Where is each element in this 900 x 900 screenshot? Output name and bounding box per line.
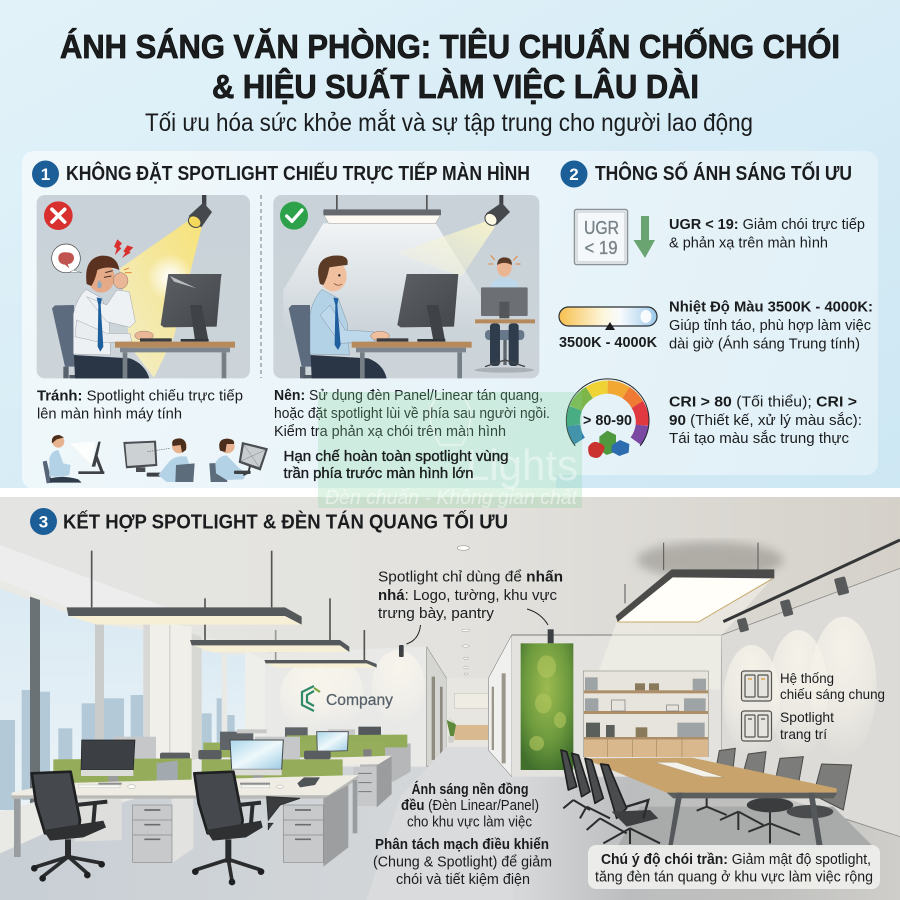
caption: avoid: lên màn hình máy tính <box>37 406 182 422</box>
icon: tilted screen <box>209 439 268 482</box>
watermark: Đèn chuẩn - Không gian chất <box>325 487 578 509</box>
label: general lighting: chiếu sáng chung <box>780 686 885 702</box>
text: colour temperature: dài giờ (Ánh sáng Trung tính) <box>669 336 860 352</box>
text: colour temperature: Nhiệt Độ Màu 3500K - 4000K: <box>669 300 873 316</box>
label: decorative spotlight: Spotlight <box>780 709 834 725</box>
label: general lighting: Hệ thống <box>780 670 834 686</box>
white separator band <box>0 488 900 497</box>
callout: background lighting <box>401 781 539 830</box>
text: CRI: Tái tạo màu sắc trung thực <box>669 430 849 447</box>
callout: background lighting: đều (Đèn Linear/Panel) <box>401 798 539 814</box>
callout: separate circuits: chói và tiết kiệm điện <box>396 872 530 888</box>
caption: recommended: Kiểm tra phản xạ chói trên màn hình <box>274 424 506 440</box>
icon: viewing reflection <box>123 438 195 482</box>
section 3 badge: 3 <box>39 512 48 532</box>
caption: recommended: Nên: Sử dụng đèn Panel/Linear tán quang, <box>274 388 543 404</box>
caption: recommended: hoặc đặt spotlight lùi về phía sau người ngồi. <box>274 406 550 422</box>
icon: CRI gauge: > 80-90 <box>583 412 632 429</box>
callout: separate circuits: (Chung & Spotlight) để giảm <box>373 854 552 870</box>
label: decorative spotlight <box>780 709 834 742</box>
caption: avoid <box>37 388 243 422</box>
section 1 badge <box>32 160 59 188</box>
text: CRI: 90 (Thiết kế, xử lý màu sắc): <box>669 412 862 429</box>
title <box>60 27 840 106</box>
office scene illustration <box>0 497 900 900</box>
icon: CRI gauge <box>566 379 649 458</box>
arrow: leader to wall spotlight <box>406 625 420 644</box>
callout: spotlight accent: trưng bày, pantry <box>378 606 495 622</box>
icon: colour temperature scale <box>559 307 658 351</box>
illustration: correct diffuse lighting <box>273 195 539 378</box>
section 3 heading: KẾT HỢP SPOTLIGHT & ĐÈN TÁN QUANG TỐI ƯU <box>63 510 508 534</box>
icon: green down arrow <box>634 216 655 258</box>
arrow: leader to green wall spotlight <box>527 609 548 625</box>
watermark <box>318 392 582 509</box>
panel: section 1 spotlight placement <box>22 151 556 489</box>
icon: UGR box: < 19 <box>584 238 618 258</box>
callout: separate circuits <box>373 837 552 888</box>
section 1 badge: 1 <box>41 165 50 184</box>
callout: separate circuits: Phân tách mạch điều khiển <box>375 837 549 853</box>
callout: spotlight accent <box>378 570 563 622</box>
callout: ceiling glare: Chú ý độ chói trần: Giảm mật độ spotlight, <box>601 852 871 868</box>
text: colour temperature: Giúp tỉnh táo, phù hợp làm việc <box>669 318 871 334</box>
subtitle: Tối ưu hóa sức khỏe mắt và sự tập trung cho người lao động <box>145 108 753 137</box>
label: decorative spotlight: trang trí <box>780 726 827 742</box>
icon: person squinting at glare <box>43 435 104 483</box>
divider between wrong and right <box>260 195 262 378</box>
section 3 badge <box>30 508 57 535</box>
illustration: wrong spotlight on screen <box>37 195 250 378</box>
section 2 badge: 2 <box>569 165 579 184</box>
callout: spotlight accent: Spotlight chỉ dùng để nhấn <box>378 570 563 586</box>
page background <box>0 0 900 490</box>
restriction note: trần phía trước màn hình lớn <box>284 466 474 482</box>
text: UGR <box>669 217 865 252</box>
callout: background lighting: cho khu vực làm việc <box>407 814 532 830</box>
text: colour temperature <box>669 300 873 352</box>
logo: Company <box>302 686 393 711</box>
icon: general lighting switch <box>742 671 772 701</box>
icon: UGR box <box>574 210 628 264</box>
icon: UGR box: UGR <box>584 218 619 238</box>
section 1 heading: KHÔNG ĐẶT SPOTLIGHT CHIẾU TRỰC TIẾP MÀN HÌNH <box>66 161 530 185</box>
restriction note: Hạn chế hoàn toàn spotlight vùng <box>284 449 508 465</box>
title: & HIỆU SUẤT LÀM VIỆC LÂU DÀI <box>212 68 699 106</box>
icon: decorative spotlight switch <box>742 711 772 741</box>
panel: section 3 office scene <box>0 497 900 900</box>
text: CRI: CRI > 80 (Tối thiểu); CRI > <box>669 394 857 410</box>
callout: background lighting: Ánh sáng nền đồng <box>412 781 528 798</box>
section 2 badge <box>560 160 588 188</box>
caption: recommended <box>274 388 550 440</box>
caption: avoid: Tránh: Spotlight chiếu trực tiếp <box>37 388 243 404</box>
callout: ceiling glare: tăng đèn tán quang ở khu vực làm việc rộng <box>595 870 873 886</box>
restriction note <box>284 449 508 482</box>
text: UGR: & phản xạ trên màn hình <box>669 236 828 252</box>
text: CRI <box>669 394 862 447</box>
title: ÁNH SÁNG VĂN PHÒNG: TIÊU CHUẨN CHỐNG CHÓI <box>60 27 840 66</box>
icon: colour temperature scale: 3500K - 4000K <box>559 335 658 351</box>
label: general lighting <box>780 670 885 702</box>
panel: section 2 optimal specs <box>556 151 878 475</box>
small icons: glare check row <box>43 435 268 483</box>
text: UGR: UGR < 19: Giảm chói trực tiếp <box>669 217 865 233</box>
watermark: Lights <box>466 441 578 490</box>
callout: spotlight accent: nhá: Logo, tường, khu vực <box>378 588 557 604</box>
section 2 heading: THÔNG SỐ ÁNH SÁNG TỐI ƯU <box>595 161 852 185</box>
logo: Company: Company <box>326 692 393 709</box>
callout: ceiling glare <box>588 845 880 889</box>
